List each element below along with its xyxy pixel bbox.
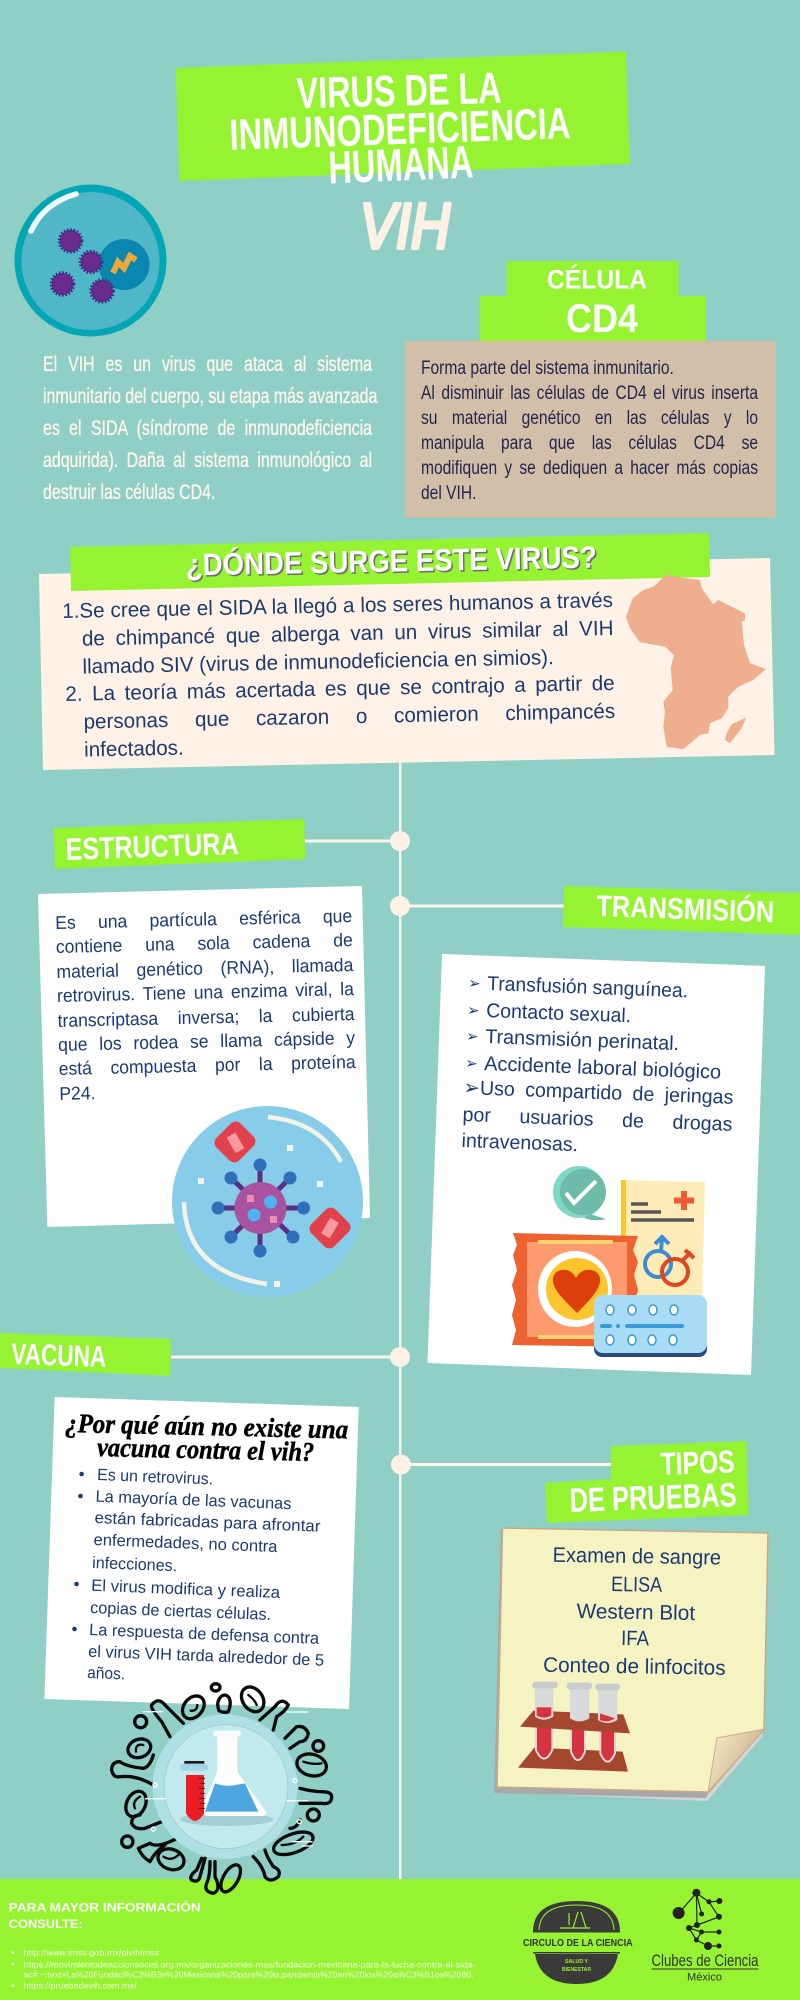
vaccine bullet list: La mayoría de las vacunas	[95, 1488, 292, 1513]
panel: CD4 background	[405, 341, 776, 518]
text: origin of the virus: infectados.	[84, 736, 184, 761]
banner: where does the virus arise	[70, 533, 710, 591]
panel: origin card	[39, 558, 774, 770]
icon: medical document with gender symbols	[621, 1180, 705, 1298]
text: estructura description: retrovirus. Tiene una enzima viral, la	[56, 979, 354, 1007]
icon: petri dish with virus attacking a cell	[14, 184, 166, 336]
text: estructura description: P24.	[59, 1082, 95, 1104]
icon: speech bubble with check mark	[553, 1166, 606, 1220]
logo: Círculo de la Ciencia: BIENESTAR	[562, 1967, 591, 1973]
footer references: ac#:~:text=La%20Fundaci%C3%B3n%20Mexicana%20para%20la,pandemia%20en%20los%20a%C3%B1os%2080.	[24, 1970, 474, 1980]
text: CD4 description: su material genético en las células y lo	[421, 408, 758, 429]
logo: Círculo de la Ciencia	[523, 1901, 633, 1984]
text: shared syringes list item: por usuarios de drogas	[462, 1103, 732, 1135]
vaccine card heading: ¿Por qué aún no existe una	[65, 1408, 348, 1444]
panel: sticky note with test list	[494, 1528, 768, 1801]
banner: célula CD4	[480, 261, 706, 342]
panel: sticky note with test list: IFA	[621, 1627, 649, 1650]
icon: map of Africa	[626, 574, 766, 749]
text: estructura description: que los rodea se llama cápside y	[57, 1027, 355, 1055]
text: origin of the virus	[62, 589, 615, 761]
logo: Clubes de Ciencia México: México	[687, 1972, 722, 1984]
timeline	[171, 763, 612, 1879]
panel: estructura card	[38, 886, 370, 1227]
vaccine bullet list: el virus VIH tarda alrededor de 5	[88, 1643, 324, 1670]
footer heading	[9, 1902, 201, 1931]
text: estructura description: material genético (RNA), llamada	[56, 954, 353, 982]
footer references: http://www.imss.gob.mx/pivihimss	[24, 1948, 159, 1958]
transmission list: Transfusión sanguínea.	[487, 973, 688, 1002]
transmission list	[465, 973, 721, 1084]
icon: flask and test tube inside a virus ring	[112, 1683, 332, 1895]
transmission list: Accidente laboral biológico	[484, 1053, 721, 1084]
logo: Clubes de Ciencia México	[652, 1889, 759, 1984]
VIH lettering: VIH	[360, 190, 451, 262]
vaccine bullet list: enfermedades, no contra	[93, 1531, 279, 1556]
banner: vacuna: VACUNA	[11, 1338, 107, 1374]
logo: Círculo de la Ciencia: SALUD Y	[565, 1959, 589, 1965]
transmission list: Contacto sexual.	[486, 1000, 632, 1027]
banner: where does the virus arise: ¿DÓNDE SURGE ESTE VIRUS?	[187, 540, 599, 584]
banner: estructura: ESTRUCTURA	[65, 826, 239, 867]
text: origin of the virus: personas que cazaron o comieron chimpancés	[83, 700, 615, 734]
text: CD4 description: del VIH.	[421, 483, 476, 504]
vaccine card heading: vacuna contra el vih?	[97, 1432, 314, 1467]
footer heading: PARA MAYOR INFORMACIÓN	[9, 1902, 201, 1915]
vaccine bullet list: Es un retrovirus.	[97, 1466, 213, 1488]
banner: célula CD4: CÉLULA	[547, 264, 647, 295]
icon: blister pack of pills	[594, 1295, 707, 1357]
panel: sticky note with test list: Examen de sangre	[552, 1544, 721, 1570]
vaccine card heading	[65, 1408, 348, 1467]
text: estructura description	[55, 905, 356, 1104]
text: origin of the virus: 2. La teoría más acertada es que se contrajo a partir de	[65, 672, 614, 706]
transmission list: ➢	[466, 1027, 479, 1045]
text: estructura description: contiene una sola cadena de	[55, 930, 353, 958]
footer references	[12, 1948, 476, 1991]
logo: Círculo de la Ciencia: CIRCULO DE LA CIENCIA	[523, 1937, 633, 1949]
text: CD4 description: modifiquen y se dediquen a hacer más copias	[421, 458, 758, 479]
vaccine bullet list	[72, 1466, 324, 1683]
text: CD4 description: Forma parte del sistema inmunitario.	[421, 358, 674, 379]
panel: transmisión card	[428, 954, 765, 1375]
transmission list: ➢	[465, 1054, 478, 1072]
footer band	[0, 1879, 800, 2000]
banner: where does the virus arise: ¿DÓNDE SURGE ESTE VIRUS?	[185, 539, 597, 582]
transmission list: ➢	[467, 1001, 480, 1019]
text: shared syringes list item: ➢Uso compartido de jeringas	[463, 1077, 733, 1109]
panel: sticky note with test list: Conteo de linfocitos	[543, 1654, 726, 1680]
vaccine bullet list: copias de ciertas células.	[90, 1599, 271, 1624]
title banner: INMUNODEFICIENCIA	[229, 99, 571, 160]
text: VIH intro paragraph	[43, 352, 378, 504]
panel: vacuna card	[44, 1397, 359, 1709]
panel: sticky note with test list: Western Blot	[576, 1600, 695, 1625]
text: estructura description: transcriptasa inversa; la cubierta	[57, 1003, 354, 1031]
footer references: https://pruebadevih.com.mx/	[24, 1981, 137, 1991]
vaccine bullet list: están fabricadas para afrontar	[94, 1509, 321, 1536]
panel: sticky note with test list: ELISA	[611, 1573, 662, 1597]
text: origin of the virus: 1.Se cree que el SIDA la llegó a los seres humanos a través	[62, 589, 613, 623]
banner: vacuna	[0, 1333, 171, 1376]
transmission list: ➢	[468, 974, 481, 992]
text: CD4 description: manipula para que las células CD4 se	[421, 433, 758, 454]
banner: tipos de pruebas: DE PRUEBAS	[569, 1476, 737, 1520]
footer heading: CONSULTE:	[9, 1919, 83, 1931]
banner: tipos de pruebas: TIPOS	[660, 1443, 735, 1482]
text: origin of the virus: de chimpancé que alberga van un virus similar al VIH	[81, 617, 613, 650]
text: VIH intro paragraph: adquirida). Daña al sistema inmunológico al	[43, 448, 372, 472]
banner: célula CD4: CD4	[566, 297, 639, 341]
icon: condom packet with heart	[512, 1233, 638, 1347]
title banner: VIRUS DE LA	[296, 64, 502, 118]
text: shared syringes list item	[461, 1077, 733, 1156]
footer references: https://movimientodeaccionsocial.org.mx/organizaciones-mas/fundacion-mexicana-para-la-lucha-contra-el-sida-	[24, 1960, 476, 1970]
vaccine bullet list: La respuesta de defensa contra	[89, 1621, 320, 1648]
title banner: HUMANA	[327, 135, 474, 193]
text: estructura description: está compuesta por la proteína	[58, 1052, 355, 1080]
text: VIH intro paragraph: El VIH es un virus que ataca al sistema	[43, 352, 372, 376]
vaccine bullet list: El virus modifica y realiza	[91, 1577, 281, 1602]
transmission list: Transmisión perinatal.	[485, 1026, 679, 1055]
text: CD4 description: Al disminuir las células de CD4 el virus inserta	[421, 383, 758, 404]
logo: Clubes de Ciencia México: Clubes de Ciencia	[652, 1951, 759, 1970]
text: VIH intro paragraph: inmunitario del cuerpo, su etapa más avanzada	[43, 384, 378, 408]
text: origin of the virus: llamado SIV (virus de inmunodeficiencia en simios).	[82, 646, 553, 678]
title banner	[176, 52, 630, 193]
vaccine bullet list: años.	[87, 1664, 126, 1683]
banner: tipos de pruebas	[545, 1441, 748, 1523]
text: estructura description: Es una partícula esférica que	[55, 905, 352, 933]
text: CD4 description	[421, 358, 758, 504]
text: VIH intro paragraph: destruir las células CD4.	[43, 480, 216, 504]
text: VIH intro paragraph: es el SIDA (síndrome de inmunodeficiencia	[43, 416, 372, 440]
icon: test tubes in a rack	[518, 1682, 630, 1772]
text: shared syringes list item: intravenosas.	[461, 1130, 578, 1156]
icon: virus in a circle	[172, 1106, 363, 1297]
vaccine bullet list: infecciones.	[92, 1554, 177, 1575]
